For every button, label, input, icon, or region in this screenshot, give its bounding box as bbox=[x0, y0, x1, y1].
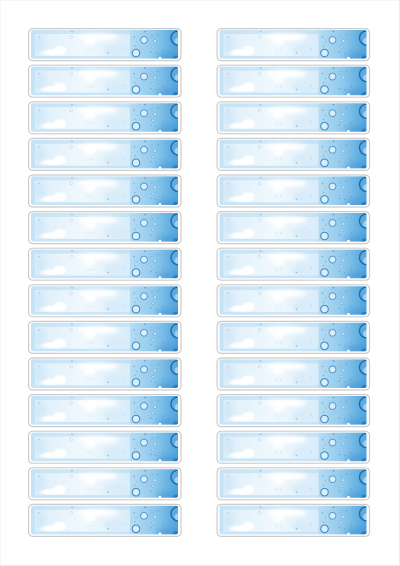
label column: left bbox=[29, 29, 185, 540]
label column: right bbox=[217, 29, 374, 540]
